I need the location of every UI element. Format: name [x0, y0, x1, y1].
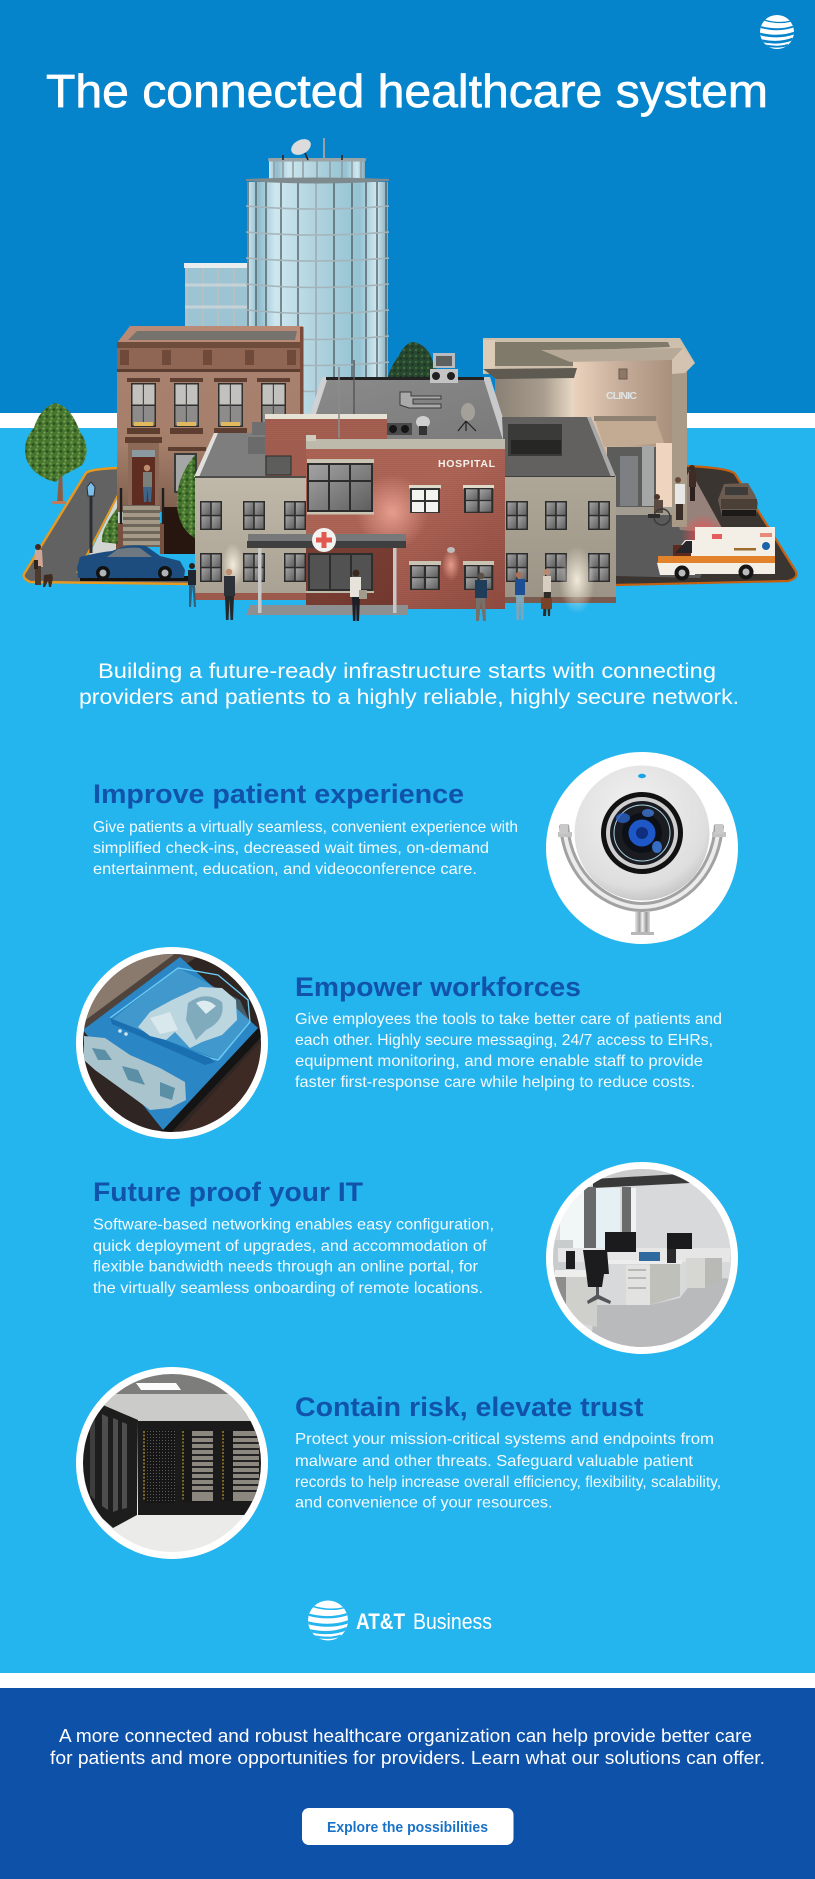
glass tower: [246, 136, 389, 437]
desks: [555, 1254, 722, 1327]
rooftop AC units: [430, 353, 458, 383]
left road: [24, 468, 190, 584]
clinic sign: CLINIC: [606, 390, 637, 402]
section: empower workforces: [76, 947, 722, 1140]
entrance sidewalk: [246, 605, 408, 615]
large window: [307, 459, 374, 514]
body text: [295, 1431, 721, 1512]
background: white stripe: [0, 413, 815, 428]
right wing wall: [505, 477, 616, 614]
image: MRI tablet in circle: [76, 947, 270, 1140]
tree: left street tree: [25, 403, 87, 504]
people: woman with case: [541, 569, 552, 616]
low glass annex: [184, 263, 256, 328]
title: The connected healthcare system: [46, 65, 768, 117]
rooftop dish: [458, 403, 476, 431]
upper right windows: [409, 485, 494, 513]
body text: entertainment, education, and videoconference care.: [93, 861, 477, 878]
body text: the virtually seamless onboarding of remote locations.: [93, 1280, 483, 1297]
logo wordmark: Business: Business: [413, 1609, 492, 1634]
brownstone building: [102, 326, 303, 554]
people: doctor: [675, 477, 685, 520]
icon: red cross sign: [312, 528, 336, 552]
heading: Empower workforces: [295, 972, 581, 1002]
lamp post: [87, 482, 95, 553]
image: server room in circle: [76, 1367, 270, 1564]
body text: [93, 819, 518, 878]
red emergency glow: [681, 514, 725, 558]
section: improve patient experience: [93, 752, 738, 944]
brick upper section: [265, 414, 387, 477]
entrance canopy with columns: [247, 534, 406, 613]
people: man on phone: [224, 569, 235, 620]
body text: [93, 1216, 494, 1297]
section: contain risk, elevate trust: [76, 1367, 721, 1564]
body text: Give patients a virtually seamless, convenient experience with: [93, 819, 518, 836]
people: person on steps: [143, 465, 152, 502]
hedges: [102, 455, 195, 544]
logo: AT&T Business: [307, 1600, 492, 1640]
rooftop vents: [387, 416, 430, 435]
icon: AT&T globe top right: [759, 15, 795, 49]
people: man in dark jacket: [475, 573, 487, 621]
people: figure on sidewalk: [689, 465, 696, 501]
clinic building: [483, 338, 695, 527]
body text: quick deployment of upgrades, and accommodation of: [93, 1238, 487, 1255]
body text: Give employees the tools to take better care of patients and: [295, 1011, 722, 1028]
people: woman with bag: [350, 570, 367, 621]
footer message: [50, 1726, 765, 1768]
body text: [295, 1011, 722, 1091]
button: explore the possibilities: Explore the possibilities: [327, 1820, 488, 1836]
background: dark blue header band: [0, 0, 815, 413]
front server racks: [138, 1421, 264, 1515]
MRI head scan: [138, 987, 237, 1048]
people: person in wheelchair: [648, 494, 670, 525]
heading: Contain risk, elevate trust: [295, 1392, 644, 1422]
hospital sign: HOSPITAL: [438, 458, 496, 470]
icon: AT&T globe: [307, 1600, 349, 1640]
office chair: [583, 1250, 609, 1287]
main hospital roof: [306, 353, 510, 440]
people: man beside building: [188, 563, 196, 607]
subtitle: providers and patients to a highly reliable, highly secure network.: [79, 686, 739, 709]
body text: each other. Highly secure messaging, 24/7 access to EHRs,: [295, 1032, 713, 1049]
entrance shade and glass: [306, 547, 396, 609]
body text: Protect your mission-critical systems and endpoints from: [295, 1431, 714, 1448]
rooftop tree behind hospital: [388, 342, 437, 378]
vehicle: ambulance: [657, 527, 775, 580]
footer message: A more connected and robust healthcare organization can help provide better care: [59, 1726, 752, 1746]
body text: simplified check-ins, decreased wait times, on-demand: [93, 840, 489, 857]
main brick hospital facade: [306, 435, 505, 609]
background: light blue body panel: [0, 428, 815, 1673]
right road: [600, 466, 796, 585]
button: explore the possibilities: [302, 1808, 514, 1845]
left wing roof: [194, 422, 265, 477]
body text: malware and other threats. Safeguard valuable patient: [295, 1453, 694, 1470]
section: future proof your IT: [93, 1162, 738, 1354]
left wing wall: [195, 476, 307, 600]
image: office in circle: [546, 1162, 738, 1354]
monitors: [605, 1232, 692, 1263]
side server rack: [80, 1405, 138, 1528]
right wing roof: [502, 417, 616, 478]
body text: equipment monitoring, and more enable staff to provide: [295, 1053, 703, 1070]
heading: Future proof your IT: [93, 1177, 363, 1207]
body text: and convenience of your resources.: [295, 1494, 552, 1512]
vehicle: parked truck: [718, 483, 758, 516]
subtitle: Building a future-ready infrastructure starts with connecting: [98, 660, 716, 683]
lower right windows: [409, 547, 494, 590]
clinic door: [607, 443, 672, 513]
brownstone stoop stairs: [116, 488, 196, 554]
brownstone door: [125, 437, 162, 505]
icon: tower satellite dish: [283, 136, 342, 160]
body text: records to help increase overall efficiency, flexibility, scalability,: [295, 1474, 721, 1491]
subtitle: [79, 660, 739, 709]
background: white stripe above footer: [0, 1673, 815, 1688]
footer message: for patients and more opportunities for providers. Learn what our solutions can offer.: [50, 1748, 765, 1768]
clinic awning: [595, 417, 664, 447]
antenna mast: [338, 367, 340, 438]
people: woman in blue: [515, 572, 525, 620]
rooftop duct: [400, 392, 441, 408]
body text: Software-based networking enables easy configuration,: [93, 1216, 494, 1234]
vehicle: blue car: [77, 545, 188, 581]
illustration: connected healthcare campus: [24, 136, 796, 621]
logo wordmark: AT&T: AT&T: [356, 1609, 405, 1634]
background: dark blue footer panel: [0, 1688, 815, 1879]
people: woman walking dog: [34, 544, 53, 587]
MRI skull slices: [84, 1036, 186, 1110]
image: webcam in white circle: [546, 752, 738, 944]
heading: Improve patient experience: [93, 779, 464, 809]
body text: flexible bandwidth needs through an online portal, for: [93, 1258, 479, 1276]
body text: faster first-response care while helping to reduce costs.: [295, 1074, 695, 1091]
